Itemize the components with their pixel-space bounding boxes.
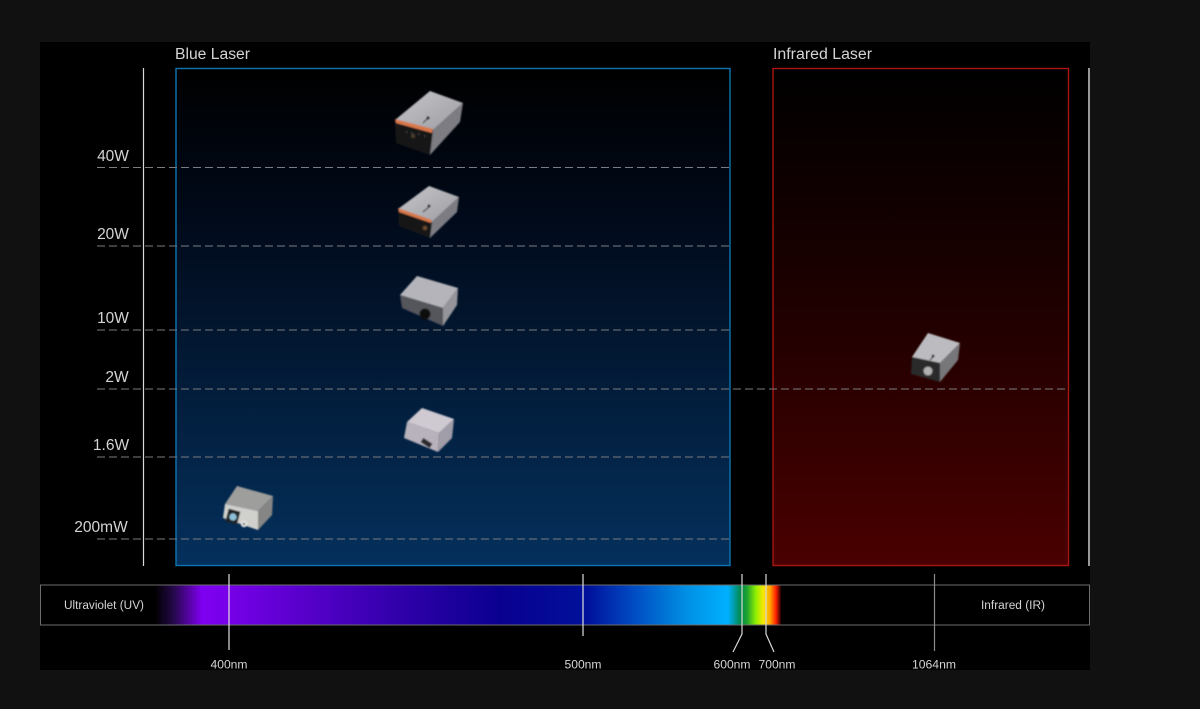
tick: 700nm: 700nm — [758, 658, 796, 672]
device: 1.6W blue laser — [404, 408, 454, 452]
tick: 1064nm: 1064nm — [912, 658, 956, 672]
device: 40W blue laser — [395, 91, 463, 155]
tick: 500nm: 500nm — [564, 658, 602, 672]
black chart background — [40, 42, 1090, 670]
device: 2W infrared laser — [911, 333, 960, 382]
label: 40W: 40W — [97, 148, 129, 165]
device: 200mW blue laser — [223, 486, 273, 530]
tick: 600nm — [714, 574, 750, 672]
label: 1.6W: 1.6W — [93, 437, 129, 454]
tick: 700nm — [758, 574, 796, 672]
tick: 400nm — [210, 574, 248, 672]
right axis — [1088, 68, 1090, 566]
panel: blue laser range — [176, 68, 730, 566]
label: 20W: 20W — [97, 226, 129, 243]
heading: Blue Laser: Blue Laser — [175, 46, 250, 63]
label: 200mW: 200mW — [74, 519, 128, 536]
tick: 600nm: 600nm — [714, 658, 750, 672]
label: 2W: 2W — [105, 369, 129, 386]
spectrum bar — [40, 585, 1090, 625]
label: Ultraviolet (UV): Ultraviolet (UV) — [64, 600, 144, 612]
tick: 500nm — [564, 574, 602, 672]
device: 10W blue laser — [400, 276, 458, 326]
device: 20W blue laser — [398, 186, 459, 238]
heading: Infrared Laser: Infrared Laser — [773, 46, 872, 63]
panel: infrared laser range — [773, 68, 1068, 566]
left power axis — [142, 68, 144, 566]
tick: 1064nm — [912, 574, 956, 672]
label: 10W: 10W — [97, 310, 129, 327]
power levels — [74, 148, 1068, 539]
tick: 400nm: 400nm — [210, 658, 248, 672]
label: Infrared (IR): Infrared (IR) — [981, 600, 1045, 612]
